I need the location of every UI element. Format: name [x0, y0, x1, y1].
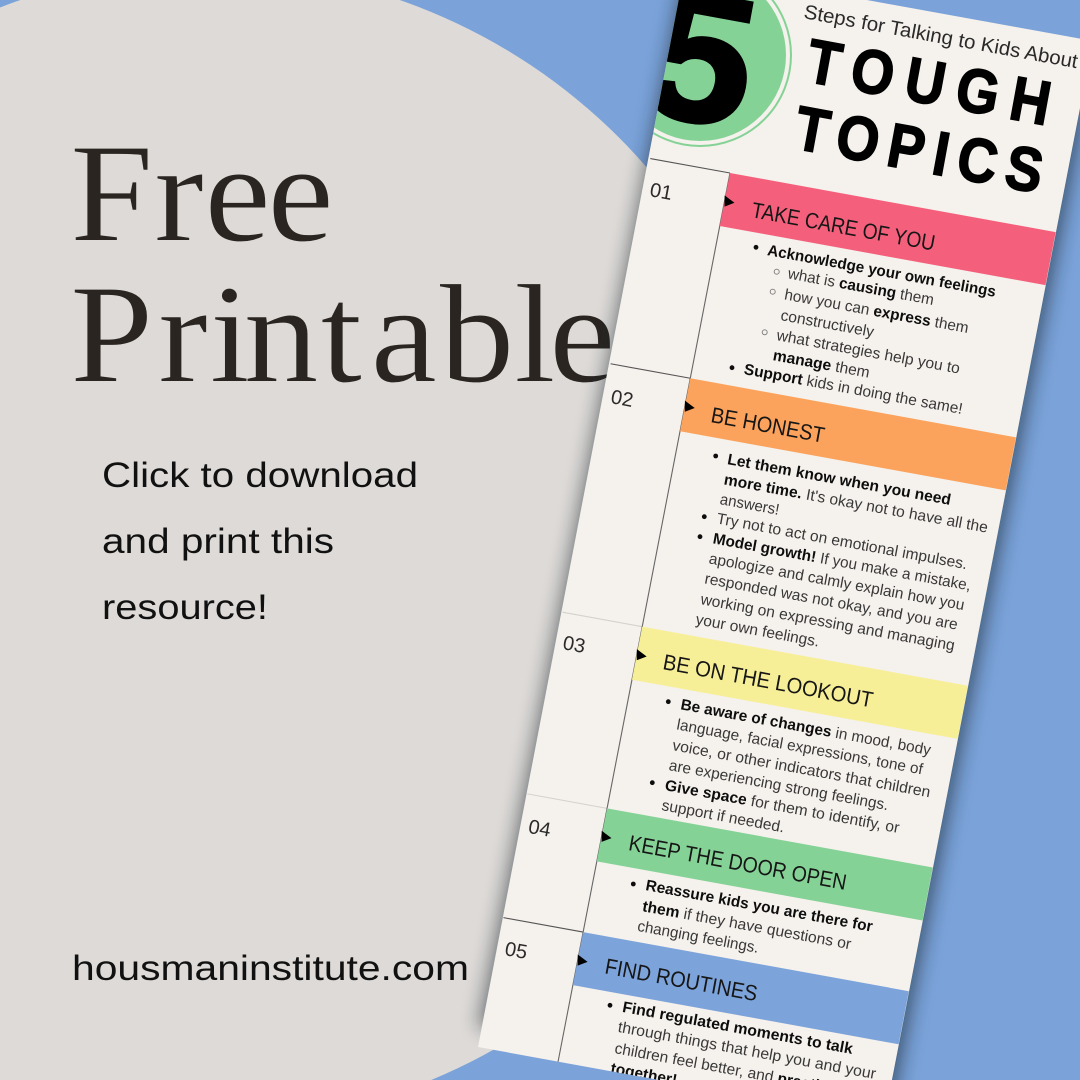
title: Tough Topics: TOUGH	[802, 27, 1068, 141]
text: step 4: Reassure kids you are there for	[644, 877, 874, 936]
text: step 5: through things that help you and your	[617, 1019, 877, 1080]
paper shadow	[478, 0, 1080, 1080]
heading: Free Printable: Printable	[70, 257, 616, 412]
text: step 1: Acknowledge your own feelings	[766, 242, 997, 301]
text: step 5: Find regulated moments to talk	[621, 999, 855, 1058]
text: step 3: support if needed.	[660, 797, 786, 836]
text: step 3: voice, or other indicators that children	[671, 737, 932, 801]
band: green	[597, 808, 933, 920]
text block: download call to action	[102, 456, 418, 627]
step numbers: 05	[503, 938, 529, 964]
panel: step 2 be honest	[694, 402, 989, 655]
heading: Free Printable	[70, 116, 616, 412]
band: orange	[680, 378, 1016, 490]
arrow: step 4	[600, 831, 613, 844]
text: step 1	[743, 242, 997, 418]
arrow: step 3	[635, 649, 648, 662]
heading: step 4: KEEP THE DOOR OPEN	[627, 830, 849, 895]
heading: step 5: FIND ROUTINES	[603, 954, 760, 1006]
background: grey circle	[0, 0, 788, 1080]
icon: big number 5 in green circle	[653, 0, 792, 147]
panel: step 4 keep the door open	[627, 830, 874, 957]
text: step 2: Model growth! If you make a mistake,	[712, 531, 972, 595]
arrow: step 1	[723, 195, 735, 208]
heading: Free Printable: Free	[70, 116, 334, 271]
title: Tough Topics	[790, 27, 1068, 208]
colour header bands	[572, 173, 1056, 1044]
table grid	[478, 159, 730, 1062]
step numbers: 02	[609, 386, 635, 412]
text: step 1: what strategies help you to	[774, 327, 961, 378]
sub bullets: step 1	[762, 269, 779, 335]
heading: step 2: BE HONEST	[709, 402, 827, 448]
band: blue	[573, 932, 909, 1044]
subtitle: Steps for Talking to Kids About	[802, 1, 1080, 73]
text: step 4: them if they have questions or	[641, 898, 853, 953]
text block: download call to action: and print this	[102, 522, 334, 561]
text: step 2: Try not to act on emotional impulses.	[715, 511, 969, 573]
paper	[478, 0, 1080, 1080]
text: step 2: answers!	[719, 491, 781, 519]
step numbers: 04	[527, 816, 552, 842]
bullets: step 2	[698, 454, 718, 539]
text: step 3: Give space for them to identify, or	[664, 777, 901, 837]
text: step 1: what is causing them	[786, 265, 935, 309]
panel: printable sheet	[478, 0, 1080, 1080]
title: Tough Topics: TOPICS	[790, 94, 1058, 208]
website url: housmaninstitute.com	[72, 949, 469, 988]
text: step 3: language, facial expressions, tone of	[675, 717, 925, 778]
text: step 2: more time. It's okay not to have all the	[723, 472, 989, 537]
heading: step 3: BE ON THE LOOKOUT	[661, 649, 875, 712]
step numbers: 01	[648, 179, 674, 205]
bullets: step 3	[650, 699, 671, 785]
arrow: step 2	[683, 401, 696, 413]
text: step 2: responded was not okay, and you are	[703, 571, 959, 634]
bullet: step 5	[608, 1003, 612, 1008]
text: step 3	[660, 697, 932, 837]
step numbers: 03	[561, 632, 587, 658]
text: step 2	[694, 451, 989, 655]
text: step 1: Support kids in doing the same!	[743, 361, 964, 418]
text block: download call to action: Click to download	[102, 456, 418, 495]
band: yellow	[632, 627, 968, 739]
heading: step 1: TAKE CARE OF YOU	[750, 197, 937, 255]
text: step 1: how you can express them	[783, 287, 970, 337]
text: step 3: Be aware of changes in mood, body	[679, 697, 932, 759]
text: step 4: changing feelings.	[636, 918, 760, 957]
text: step 2: Let them know when you need	[726, 451, 952, 509]
text block: download call to action: resource!	[102, 588, 268, 627]
text: step 1: constructively	[779, 307, 876, 341]
text: step 2: working on expressing and managing	[698, 591, 956, 655]
panel: step 3 be on the lookout	[650, 649, 932, 837]
text: step 2: apologize and calmly explain how you	[708, 551, 966, 614]
arrow: step 5	[576, 954, 589, 967]
text: step 2: your own feelings.	[694, 611, 821, 651]
panel: step 1 take care of you	[730, 197, 997, 418]
text: step 3: are experiencing strong feelings.	[668, 757, 890, 814]
bullet: step 4	[631, 882, 636, 886]
panel: step 5 find routines	[603, 954, 878, 1080]
bullets: step 1	[730, 245, 758, 370]
step numbers	[503, 179, 674, 964]
band: pink	[720, 173, 1056, 285]
text: step 1: manage them	[772, 347, 871, 382]
